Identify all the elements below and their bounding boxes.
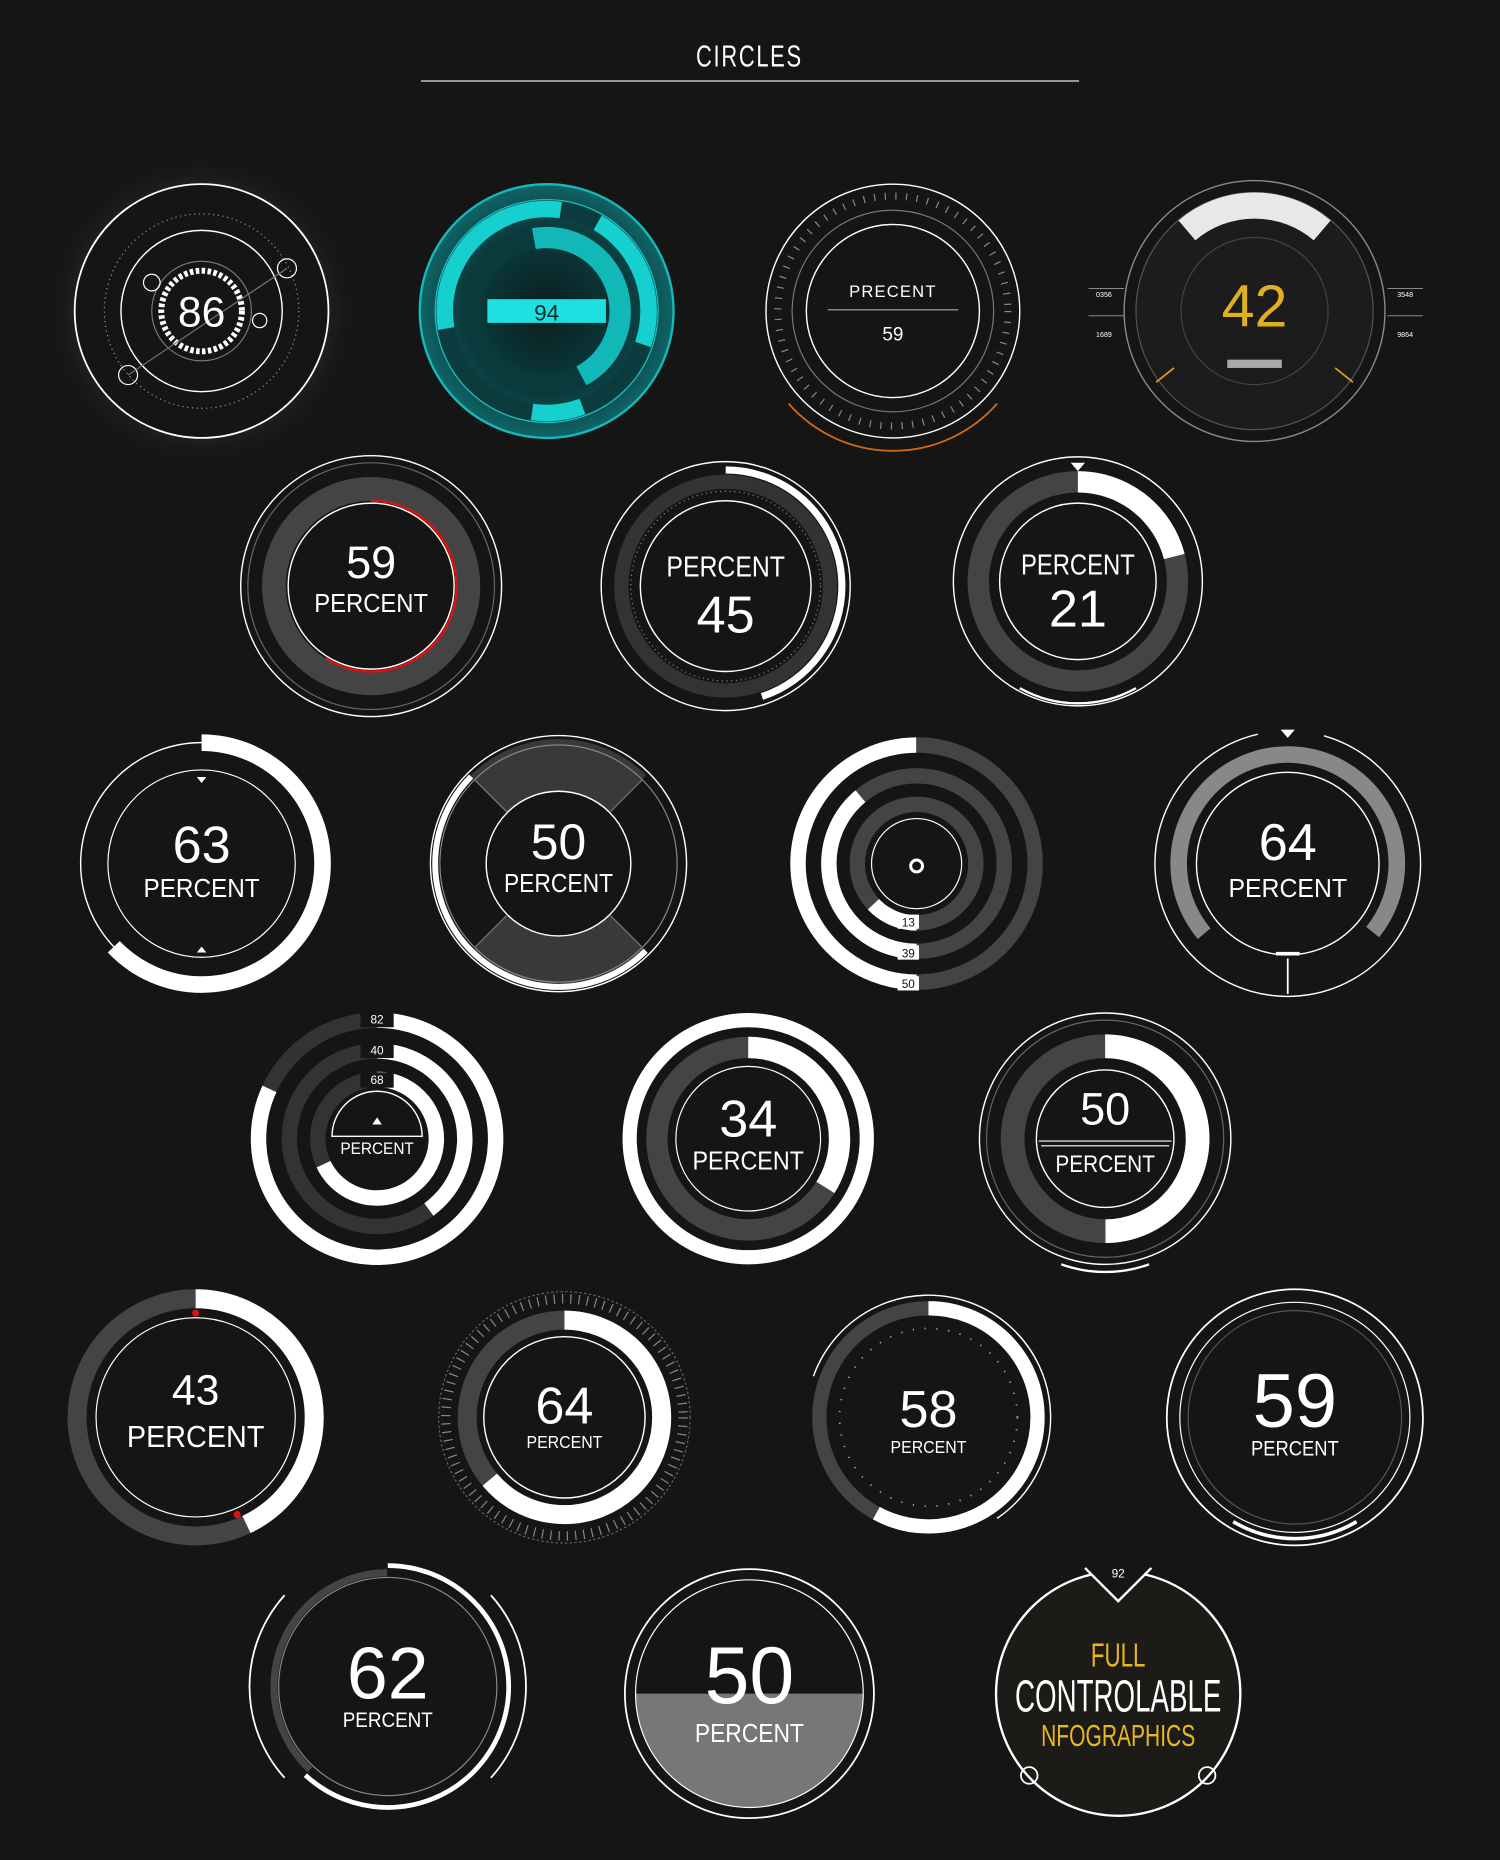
circle 59 precent: PRECENT xyxy=(849,282,937,301)
circle 58 xyxy=(772,1261,1085,1574)
circle 62 xyxy=(227,1526,549,1847)
circle 50 fill: PERCENT xyxy=(695,1718,804,1748)
circle 94 teal: 94 xyxy=(534,301,559,326)
circle full controlable: NFOGRAPHICS xyxy=(1041,1718,1195,1753)
circle 59 big: 59 xyxy=(1253,1359,1337,1444)
circle 42 xyxy=(1089,181,1423,441)
circle 64 xyxy=(1123,699,1452,1028)
circle 62: 62 xyxy=(347,1631,429,1714)
circle 45: 45 xyxy=(697,586,755,644)
circle 34: PERCENT xyxy=(692,1146,804,1176)
circle 86: 86 xyxy=(178,288,225,336)
circle 59 precent xyxy=(766,184,1020,451)
circle 82/40/68: 68 xyxy=(370,1073,384,1087)
circle 64 ticks xyxy=(439,1292,690,1543)
circle full controlable xyxy=(996,1566,1240,1816)
circle 45: PERCENT xyxy=(666,552,785,584)
circle 59 red xyxy=(241,456,502,717)
circle full controlable: FULL xyxy=(1091,1637,1145,1674)
circle 43 xyxy=(77,1299,314,1536)
circle 64 ticks: 64 xyxy=(535,1377,593,1435)
title: CIRCLES xyxy=(696,39,803,74)
circle full controlable: 92 xyxy=(1112,1566,1125,1580)
circle 13/39/50: 39 xyxy=(902,946,915,960)
circle 59 big: PERCENT xyxy=(1251,1436,1339,1460)
circle 50 band xyxy=(979,1013,1231,1272)
circle 94 teal xyxy=(407,172,686,450)
circle 34 xyxy=(630,1020,867,1257)
circle 50 fill xyxy=(625,1569,874,1818)
circle 43: PERCENT xyxy=(127,1419,265,1454)
circle 34: 34 xyxy=(719,1090,777,1148)
circle 63: PERCENT xyxy=(143,873,260,903)
circle 50 band: 50 xyxy=(1080,1083,1130,1134)
circle 13/39/50: 50 xyxy=(902,977,915,991)
circle 63: 63 xyxy=(173,816,231,874)
circle 64: 64 xyxy=(1259,814,1317,872)
circle 82/40/68: 82 xyxy=(370,1013,384,1027)
circle 50 fill: 50 xyxy=(705,1631,794,1721)
circle 86 xyxy=(42,151,362,471)
circle full controlable: CONTROLABLE xyxy=(1015,1670,1221,1721)
circle 62: PERCENT xyxy=(343,1708,433,1732)
circle 21: 21 xyxy=(1049,580,1107,638)
circle 42: 42 xyxy=(1222,272,1288,339)
circle 58: 58 xyxy=(899,1381,957,1439)
circle 58: PERCENT xyxy=(891,1437,967,1457)
circle 59 big xyxy=(1167,1289,1423,1545)
circle 21: PERCENT xyxy=(1021,549,1135,581)
circle 42: 0356 xyxy=(1096,291,1112,299)
circle 64 ticks: PERCENT xyxy=(526,1432,603,1452)
circle 59 red: 59 xyxy=(346,537,396,588)
circle 50 band: PERCENT xyxy=(1055,1152,1155,1178)
circle 42: 9864 xyxy=(1397,331,1413,339)
circle 82/40/68: PERCENT xyxy=(340,1139,414,1158)
circle 13/39/50 xyxy=(798,745,1035,991)
circle 59 precent: 59 xyxy=(882,325,903,346)
circle 45 xyxy=(601,462,850,711)
circle 50 cross: 50 xyxy=(531,814,586,870)
circle 43: 43 xyxy=(172,1366,219,1414)
circle 64: PERCENT xyxy=(1228,873,1347,903)
circle 42: 1689 xyxy=(1096,331,1112,339)
circle 63 xyxy=(81,743,323,985)
circle 42: 3548 xyxy=(1397,291,1413,299)
circle 13/39/50: 13 xyxy=(902,915,915,929)
circle 50 cross: PERCENT xyxy=(504,868,613,898)
circle 82/40/68: 40 xyxy=(370,1044,384,1058)
circle 21 xyxy=(953,457,1202,706)
circle 59 red: PERCENT xyxy=(314,588,428,618)
circle 82/40/68 xyxy=(258,1012,496,1257)
circle 50 cross xyxy=(384,689,733,1038)
